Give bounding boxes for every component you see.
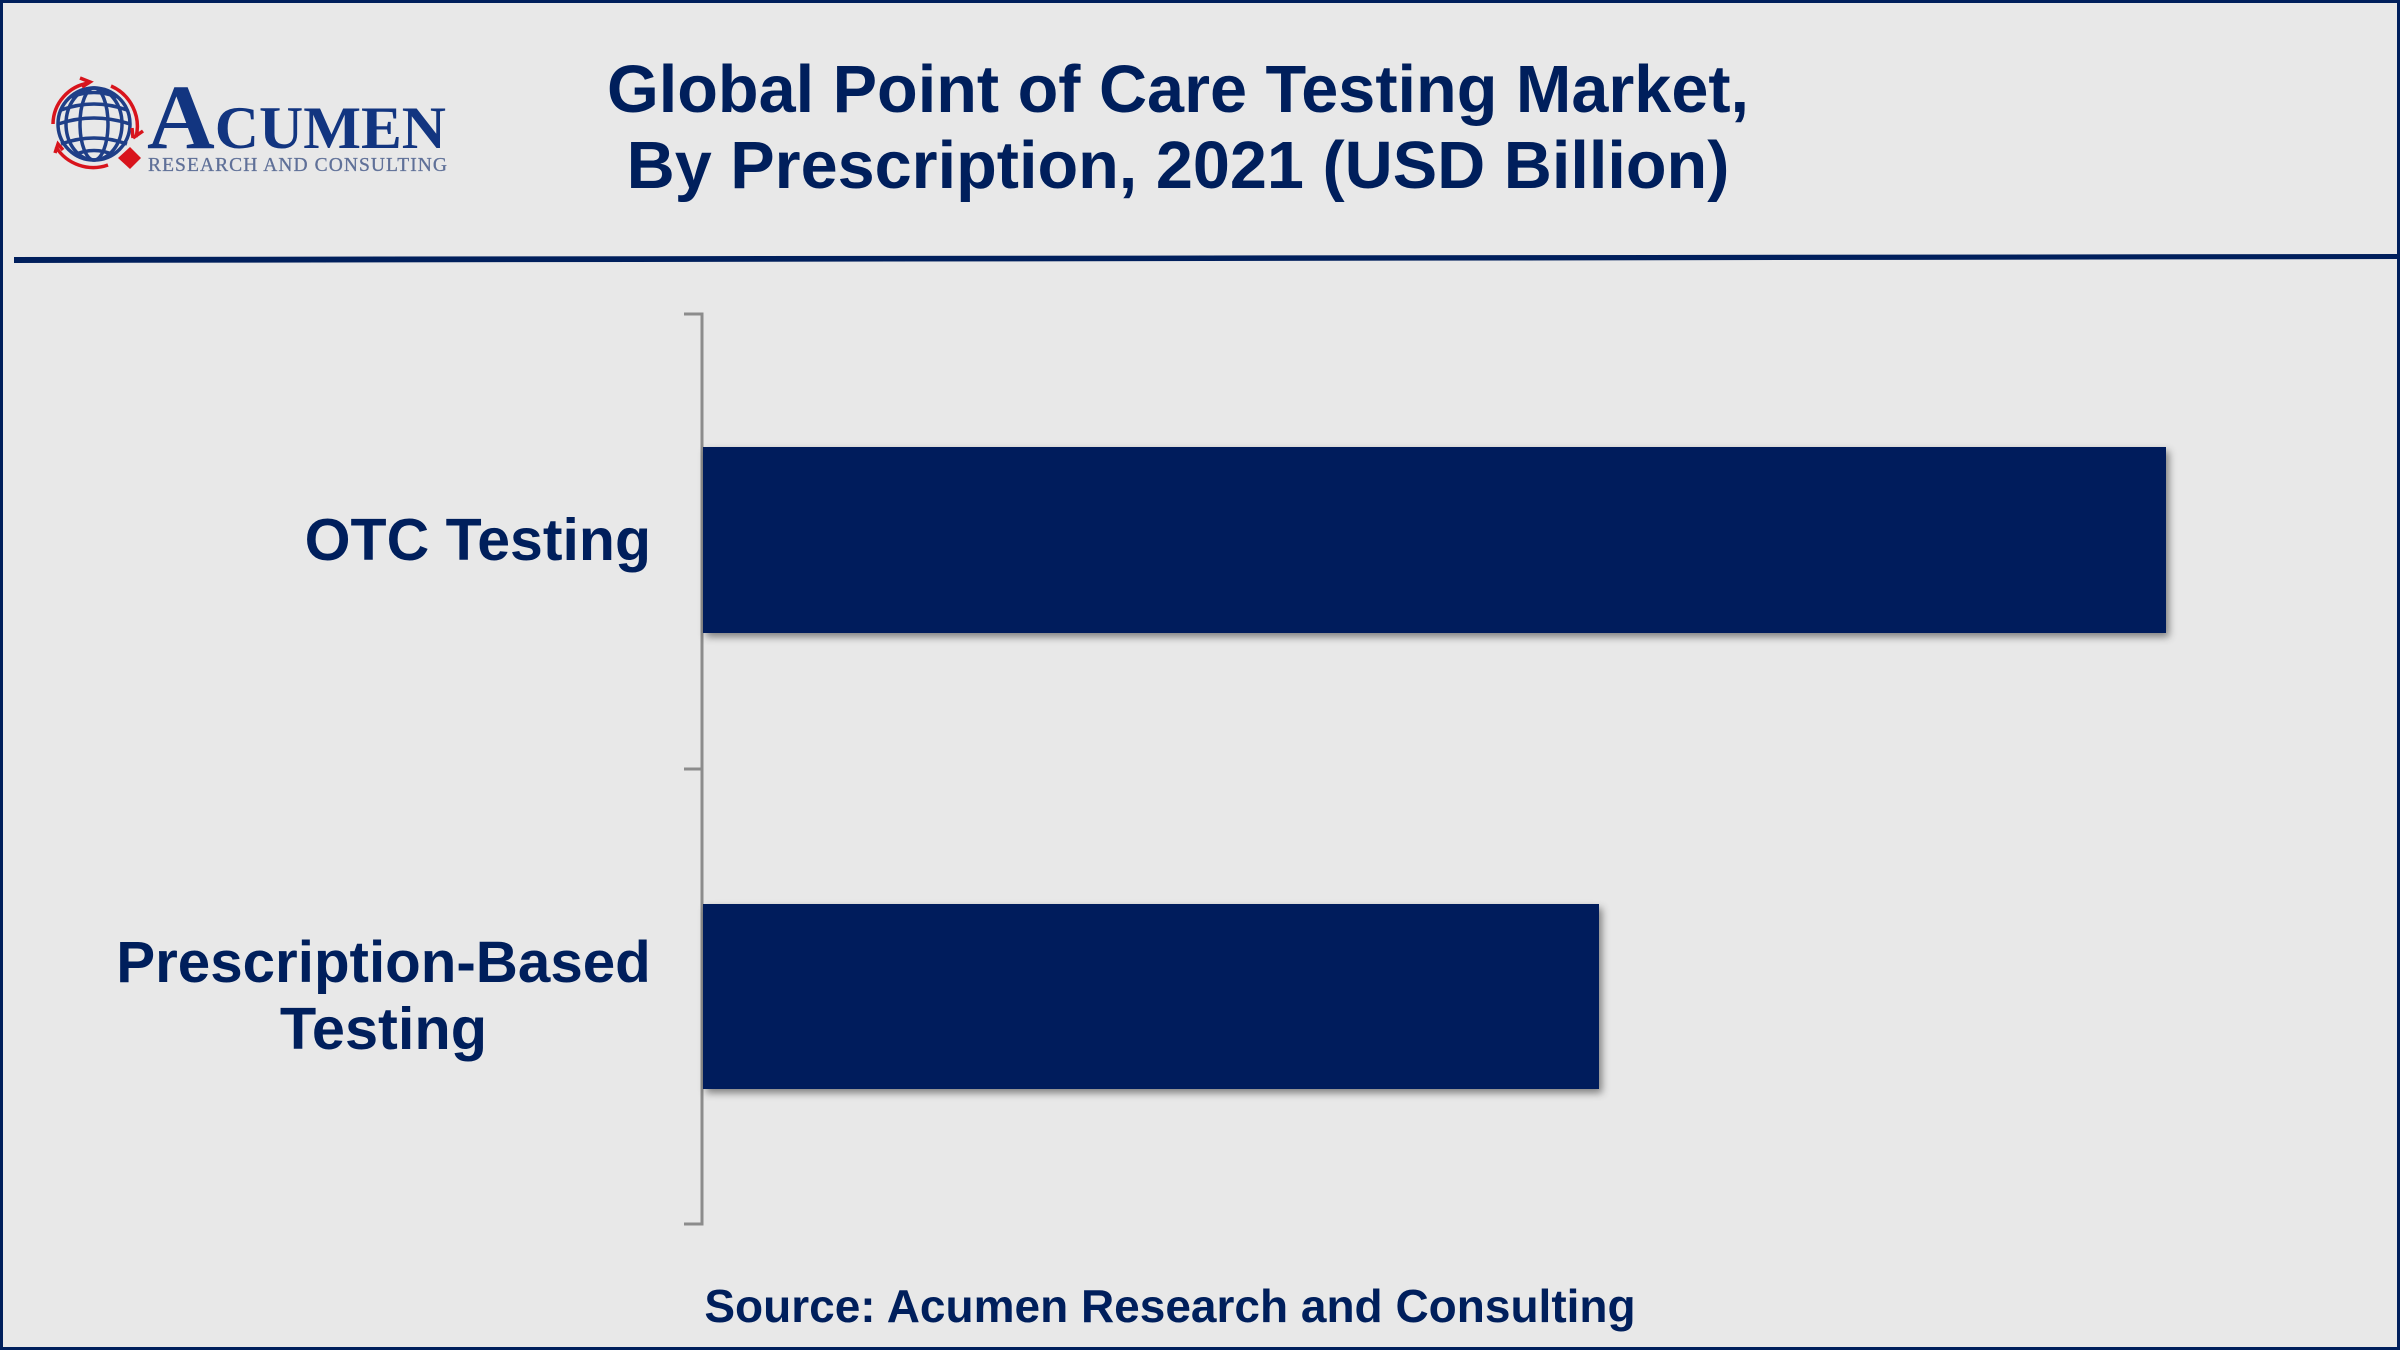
category axis bbox=[684, 314, 702, 1224]
logo: Acumen Research and Consulting bbox=[53, 66, 447, 176]
label: Prescription-Based Testing: Prescription-Based bbox=[116, 930, 651, 995]
bar chart bbox=[116, 314, 2166, 1224]
header divider bbox=[14, 254, 2400, 263]
label: Prescription-Based Testing: Testing bbox=[280, 995, 487, 1062]
bar: OTC Testing bbox=[703, 447, 2166, 633]
icon: globe bbox=[58, 88, 130, 160]
title: Global Point of Care Testing Market, bbox=[607, 53, 1749, 127]
title: By Prescription, 2021 (USD Billion) bbox=[627, 129, 1729, 203]
label: OTC Testing: OTC Testing bbox=[305, 507, 651, 573]
title bbox=[607, 53, 1749, 203]
icon: red circular arrows bbox=[53, 78, 143, 168]
logo tagline: RESEARCH AND CONSULTING bbox=[148, 155, 447, 176]
label: Prescription-Based Testing bbox=[116, 930, 651, 1062]
bar: Prescription-Based Testing bbox=[703, 904, 1599, 1089]
icon: red diamond bbox=[118, 147, 141, 169]
source note: Source: Acumen Research and Consulting bbox=[704, 1280, 1636, 1332]
logo wordmark: ACUMEN bbox=[147, 66, 446, 168]
